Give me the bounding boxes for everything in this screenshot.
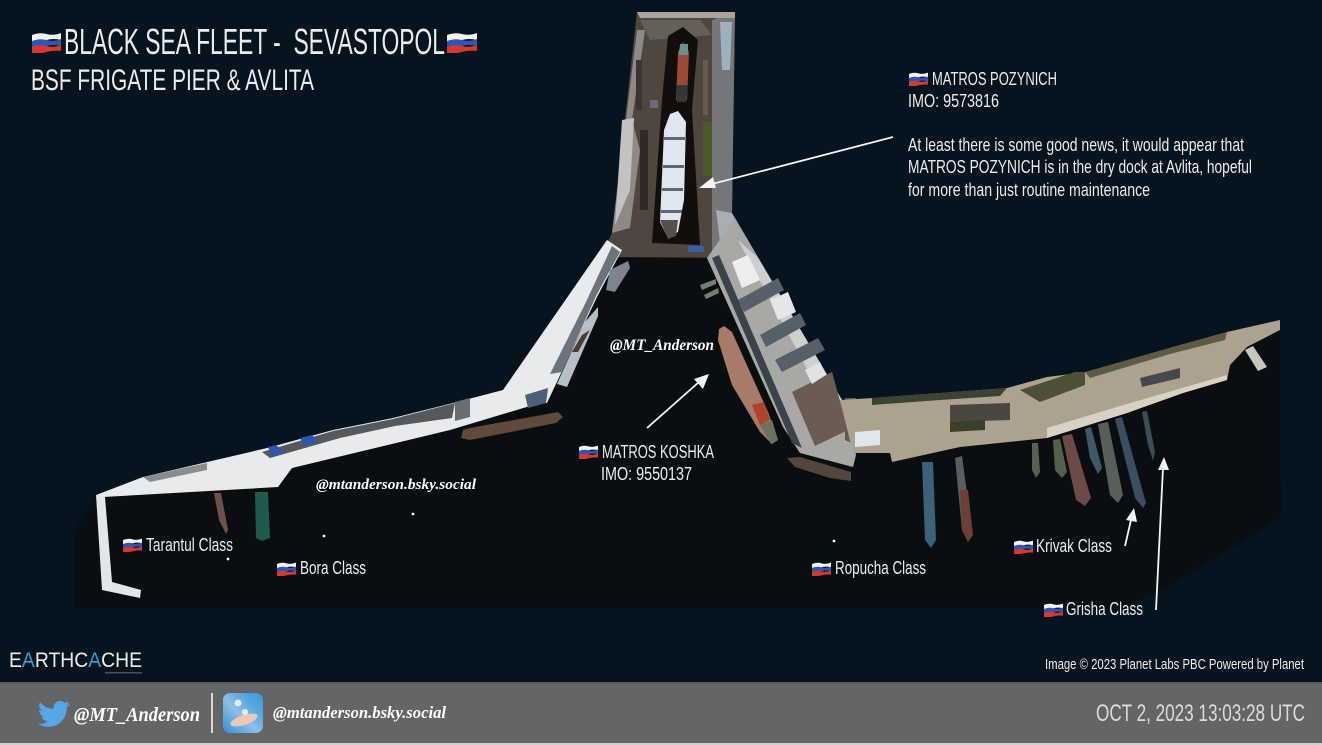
label: Bora Class: Bora Class bbox=[300, 558, 366, 578]
logo: Earthcache: EARTHCACHE bbox=[9, 649, 142, 672]
footer bar bbox=[0, 682, 1322, 745]
title line 2: BSF FRIGATE PIER & AVLITA bbox=[31, 64, 314, 97]
IMO number: IMO: 9550137 bbox=[601, 464, 692, 484]
label: Krivak Class bbox=[1014, 536, 1112, 556]
frigate pier bbox=[840, 320, 1280, 462]
flag icon bbox=[32, 33, 61, 53]
label: Krivak Class: Krivak Class bbox=[1036, 536, 1112, 556]
label: Grisha Class: Grisha Class bbox=[1066, 599, 1143, 619]
label: Ropucha Class bbox=[812, 558, 926, 578]
bluesky handle: @mtanderson.bsky.social bbox=[273, 703, 446, 722]
divider bbox=[211, 693, 213, 733]
harbour water bbox=[75, 240, 1281, 608]
callout: Matros Pozynich bbox=[908, 69, 1252, 200]
title line 1: BLACK SEA FLEET - SEVASTOPOL bbox=[64, 21, 445, 62]
icon: bluesky avatar bbox=[223, 693, 263, 733]
callout: Matros Koshka bbox=[579, 442, 714, 484]
description bbox=[908, 135, 1252, 200]
east arm with shipyard bbox=[707, 218, 856, 467]
IMO number: IMO: 9573816 bbox=[908, 91, 999, 111]
label: Tarantul Class: Tarantul Class bbox=[146, 535, 233, 555]
vessel name: MATROS KOSHKA bbox=[602, 442, 714, 462]
title bbox=[31, 21, 477, 97]
twitter handle: @MT_Anderson bbox=[74, 704, 200, 726]
handle watermark: MT Anderson: @MT_Anderson bbox=[610, 337, 714, 354]
vessel along west arm bbox=[557, 307, 598, 387]
left pier with western arm bbox=[96, 240, 622, 598]
barge at east arm bbox=[787, 457, 851, 481]
arrow to Krivak Class bbox=[1125, 508, 1137, 546]
ship: Matros Pozynich bbox=[660, 111, 686, 239]
buoys bbox=[227, 513, 835, 560]
flag icon bbox=[909, 73, 928, 86]
dry dock basin bbox=[652, 27, 700, 245]
icon: twitter bird bbox=[38, 701, 70, 727]
satellite image of harbour bbox=[75, 12, 1281, 608]
ship in dock: upper vessel bbox=[676, 42, 689, 102]
description: for more than just routine maintenance bbox=[908, 180, 1150, 200]
label: Grisha Class bbox=[1044, 599, 1143, 619]
breakwater bbox=[96, 495, 141, 598]
label: Bora Class bbox=[277, 558, 366, 578]
flag icon bbox=[447, 33, 477, 53]
ship: Matros Koshka bbox=[718, 326, 778, 444]
barge at west arm bbox=[461, 412, 563, 440]
moored vessels bbox=[214, 261, 1155, 548]
label: Tarantul Class bbox=[123, 535, 233, 555]
flag icon bbox=[579, 446, 598, 459]
arrow to Matros Pozynich bbox=[699, 137, 893, 188]
arrow to Grisha Class bbox=[1156, 457, 1169, 610]
arrow to Matros Koshka bbox=[647, 374, 709, 428]
dry dock surroundings bbox=[600, 12, 757, 258]
Tarantul and Bora ships bbox=[214, 493, 228, 534]
tugs bbox=[700, 279, 716, 290]
vessel name: MATROS POZYNICH bbox=[932, 69, 1057, 89]
handle watermark: bluesky: @mtanderson.bsky.social bbox=[316, 477, 477, 493]
label: Ropucha Class: Ropucha Class bbox=[835, 558, 926, 578]
frigate pier ships bbox=[922, 462, 936, 548]
